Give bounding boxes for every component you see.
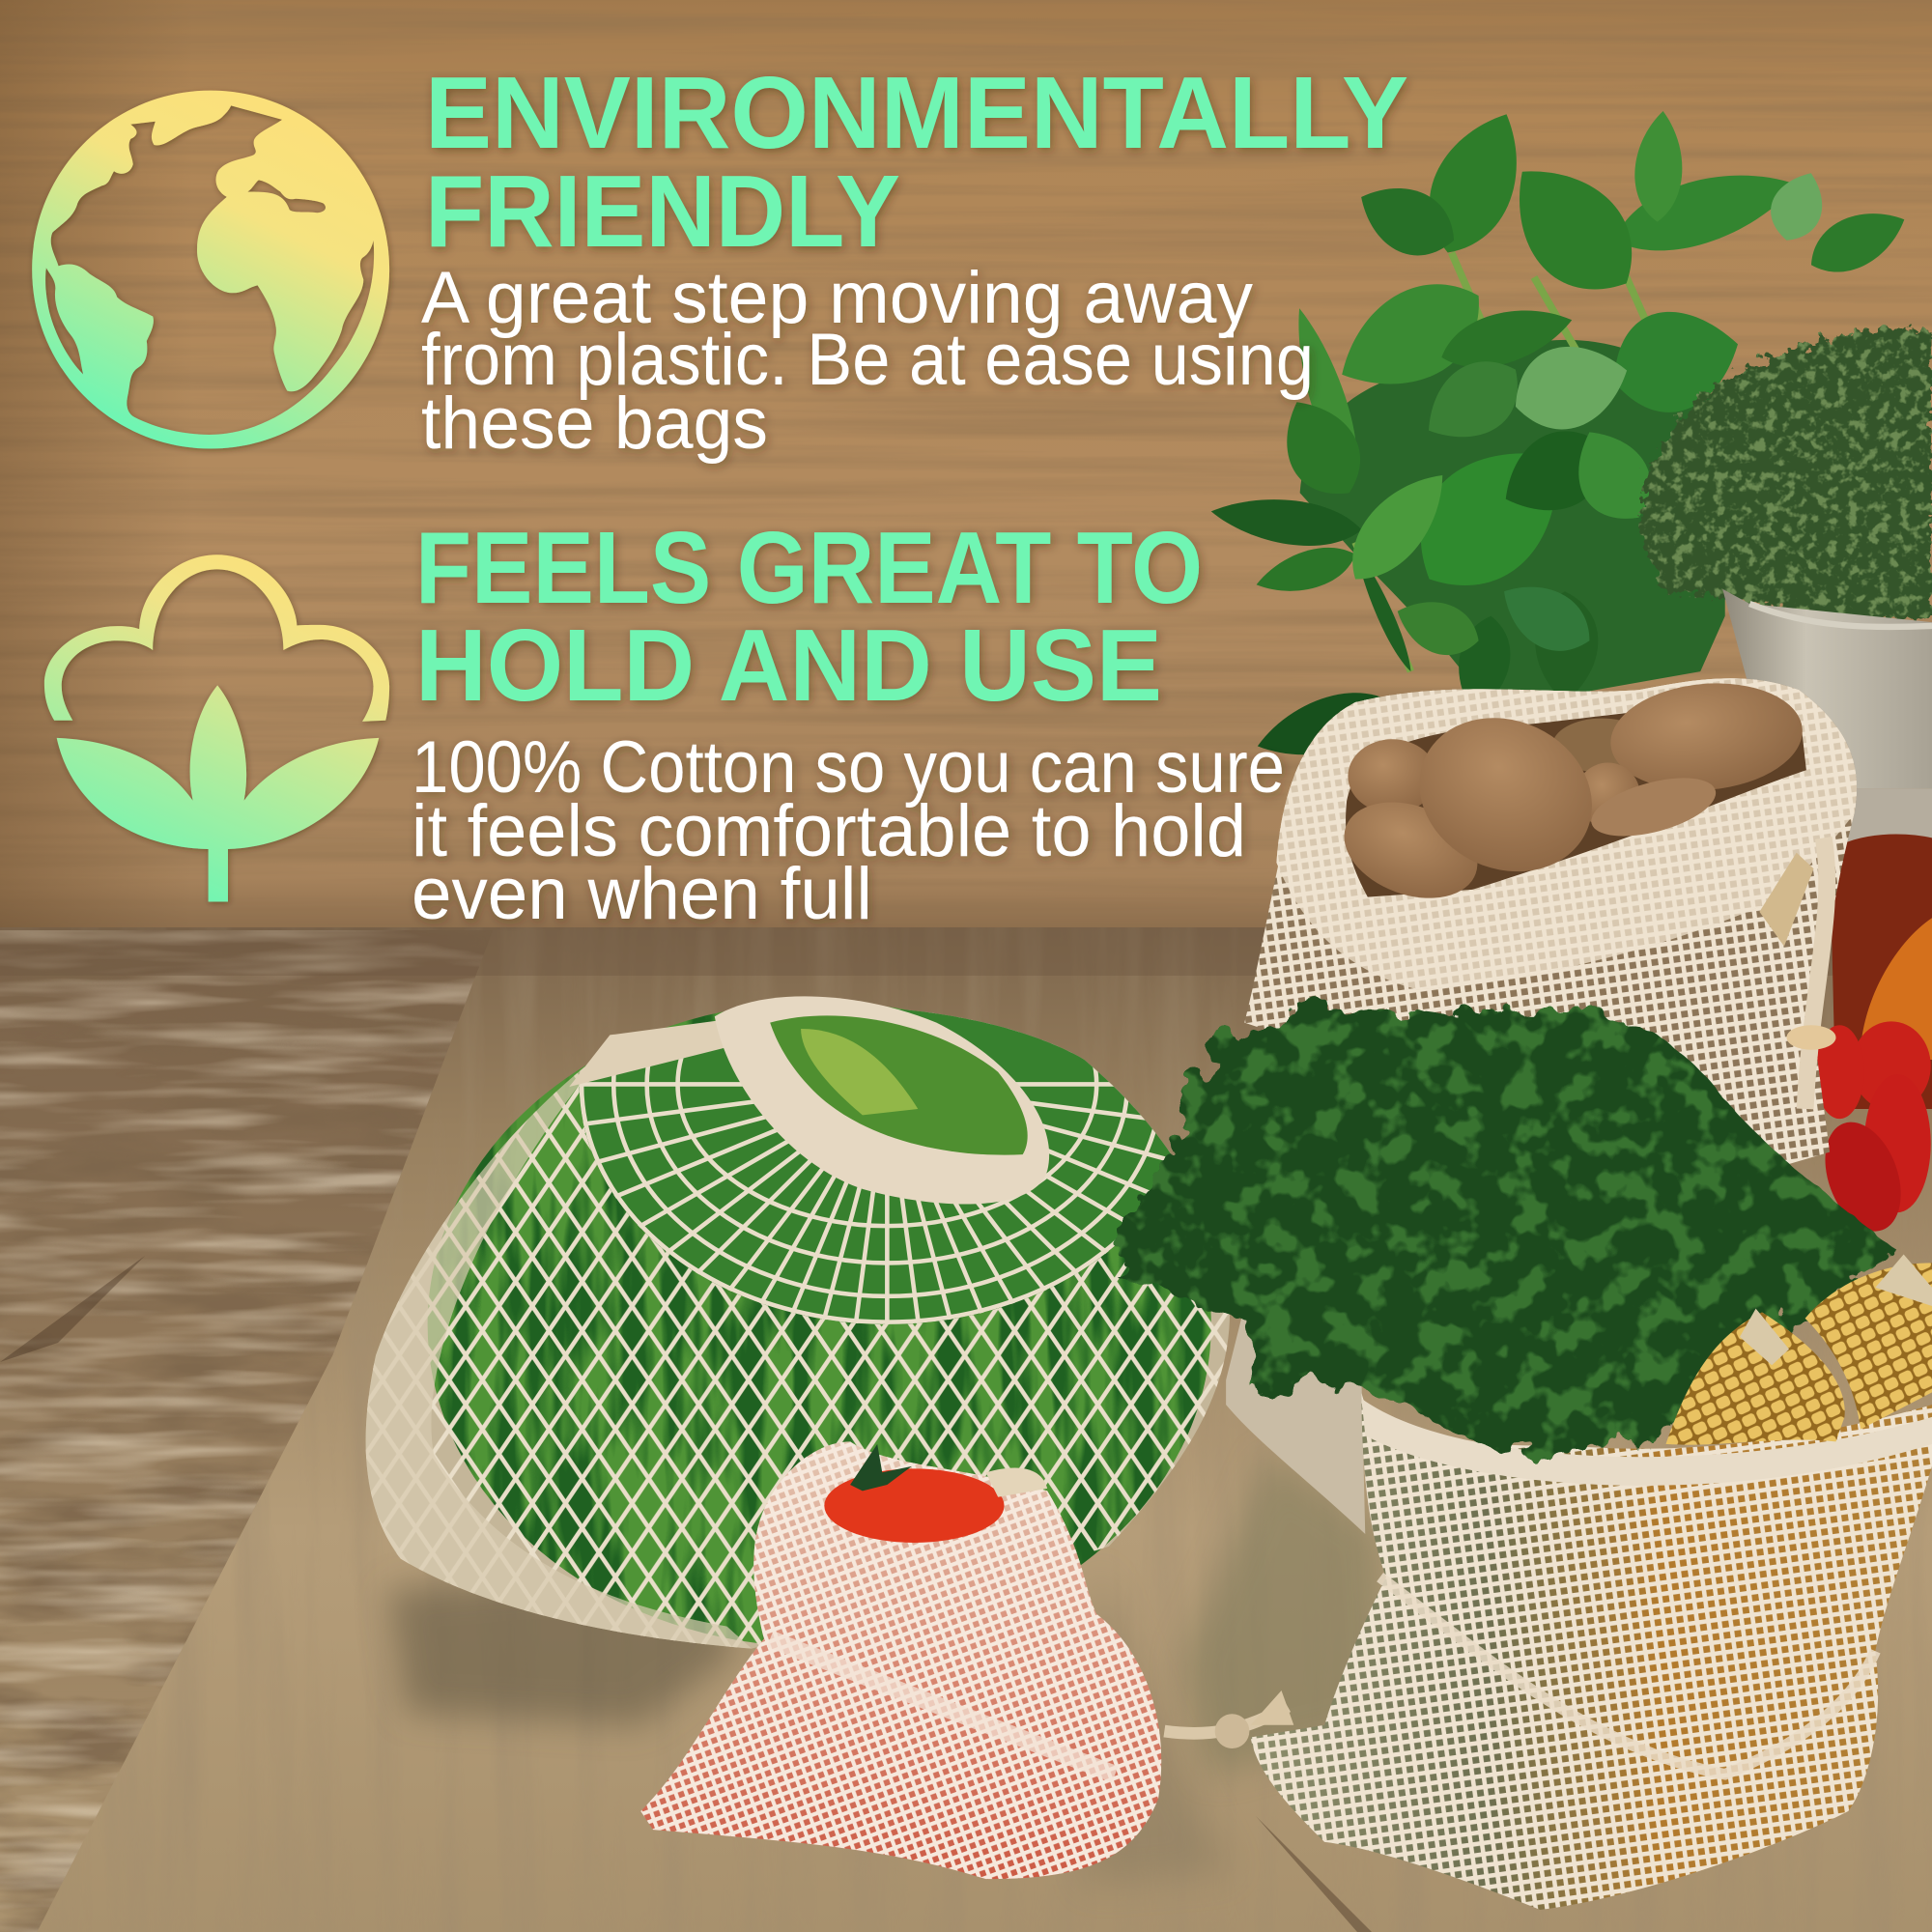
outer net fill [366, 1007, 1230, 1649]
corn cobs [1665, 1254, 1932, 1445]
heading: environmentally friendly [425, 56, 1408, 269]
cord knot [1164, 1690, 1293, 1748]
text: feels great body: 100% Cotton so you can sure [412, 726, 1285, 809]
drawstring and bead [1786, 838, 1836, 1109]
text: environmentally friendly body [421, 257, 1314, 465]
bag label tag [1759, 853, 1814, 947]
folded rim [1276, 678, 1857, 989]
heading: environmentally friendly: FRIENDLY [425, 155, 900, 269]
diamond net strands [357, 985, 1244, 1658]
bag folds [1380, 1577, 1875, 1775]
plant: mint leaves [1208, 98, 1915, 773]
bag fold [770, 1638, 1115, 1775]
plant: thyme [1638, 327, 1932, 622]
potato bag lower section behind kale [1226, 1306, 1365, 1534]
shoulder strap [569, 1020, 727, 1087]
collar [715, 996, 1049, 1205]
metal bucket [1722, 589, 1932, 788]
outer fine netting [366, 1047, 752, 1649]
text: environmentally friendly body: A great step moving away [421, 257, 1253, 339]
heading: environmentally friendly: ENVIRONMENTALLY [425, 56, 1408, 170]
heading: feels great: HOLD AND USE [415, 609, 1162, 723]
reflections on the floor [388, 1454, 1392, 1886]
text: environmentally friendly body: from plastic. Be at ease using [421, 319, 1314, 401]
background: wooden floor [0, 927, 1932, 1932]
text: environmentally friendly body: these bags [421, 383, 768, 465]
potato bag [1244, 675, 1857, 1182]
watermelon body [428, 1002, 1211, 1647]
text: feels great body: it feels comfortable to hold [412, 790, 1246, 872]
kale [1109, 1007, 1897, 1454]
heading: feels great: FEELS GREAT TO [415, 511, 1203, 625]
heading: feels great [415, 511, 1203, 723]
text: feels great body [412, 726, 1285, 935]
text: feels great body: even when full [412, 853, 872, 935]
potatoes [1331, 675, 1806, 916]
background: wooden wall [0, 0, 1932, 942]
front right bag with corn [1164, 1392, 1932, 1910]
icon: earth globe [32, 91, 389, 449]
watermelon top visible through collar [770, 1015, 1028, 1155]
tomato [824, 1444, 1005, 1543]
cotton leaves and stem [57, 685, 379, 902]
icon: cotton plant [44, 554, 389, 902]
net fan below collar [580, 1009, 1171, 1325]
tomatoes [1811, 1021, 1931, 1241]
glass jar [1821, 788, 1932, 1109]
small tomato bag [640, 1441, 1161, 1879]
watermelon in net bag [365, 996, 1230, 1649]
cotton boll outline [44, 554, 389, 722]
